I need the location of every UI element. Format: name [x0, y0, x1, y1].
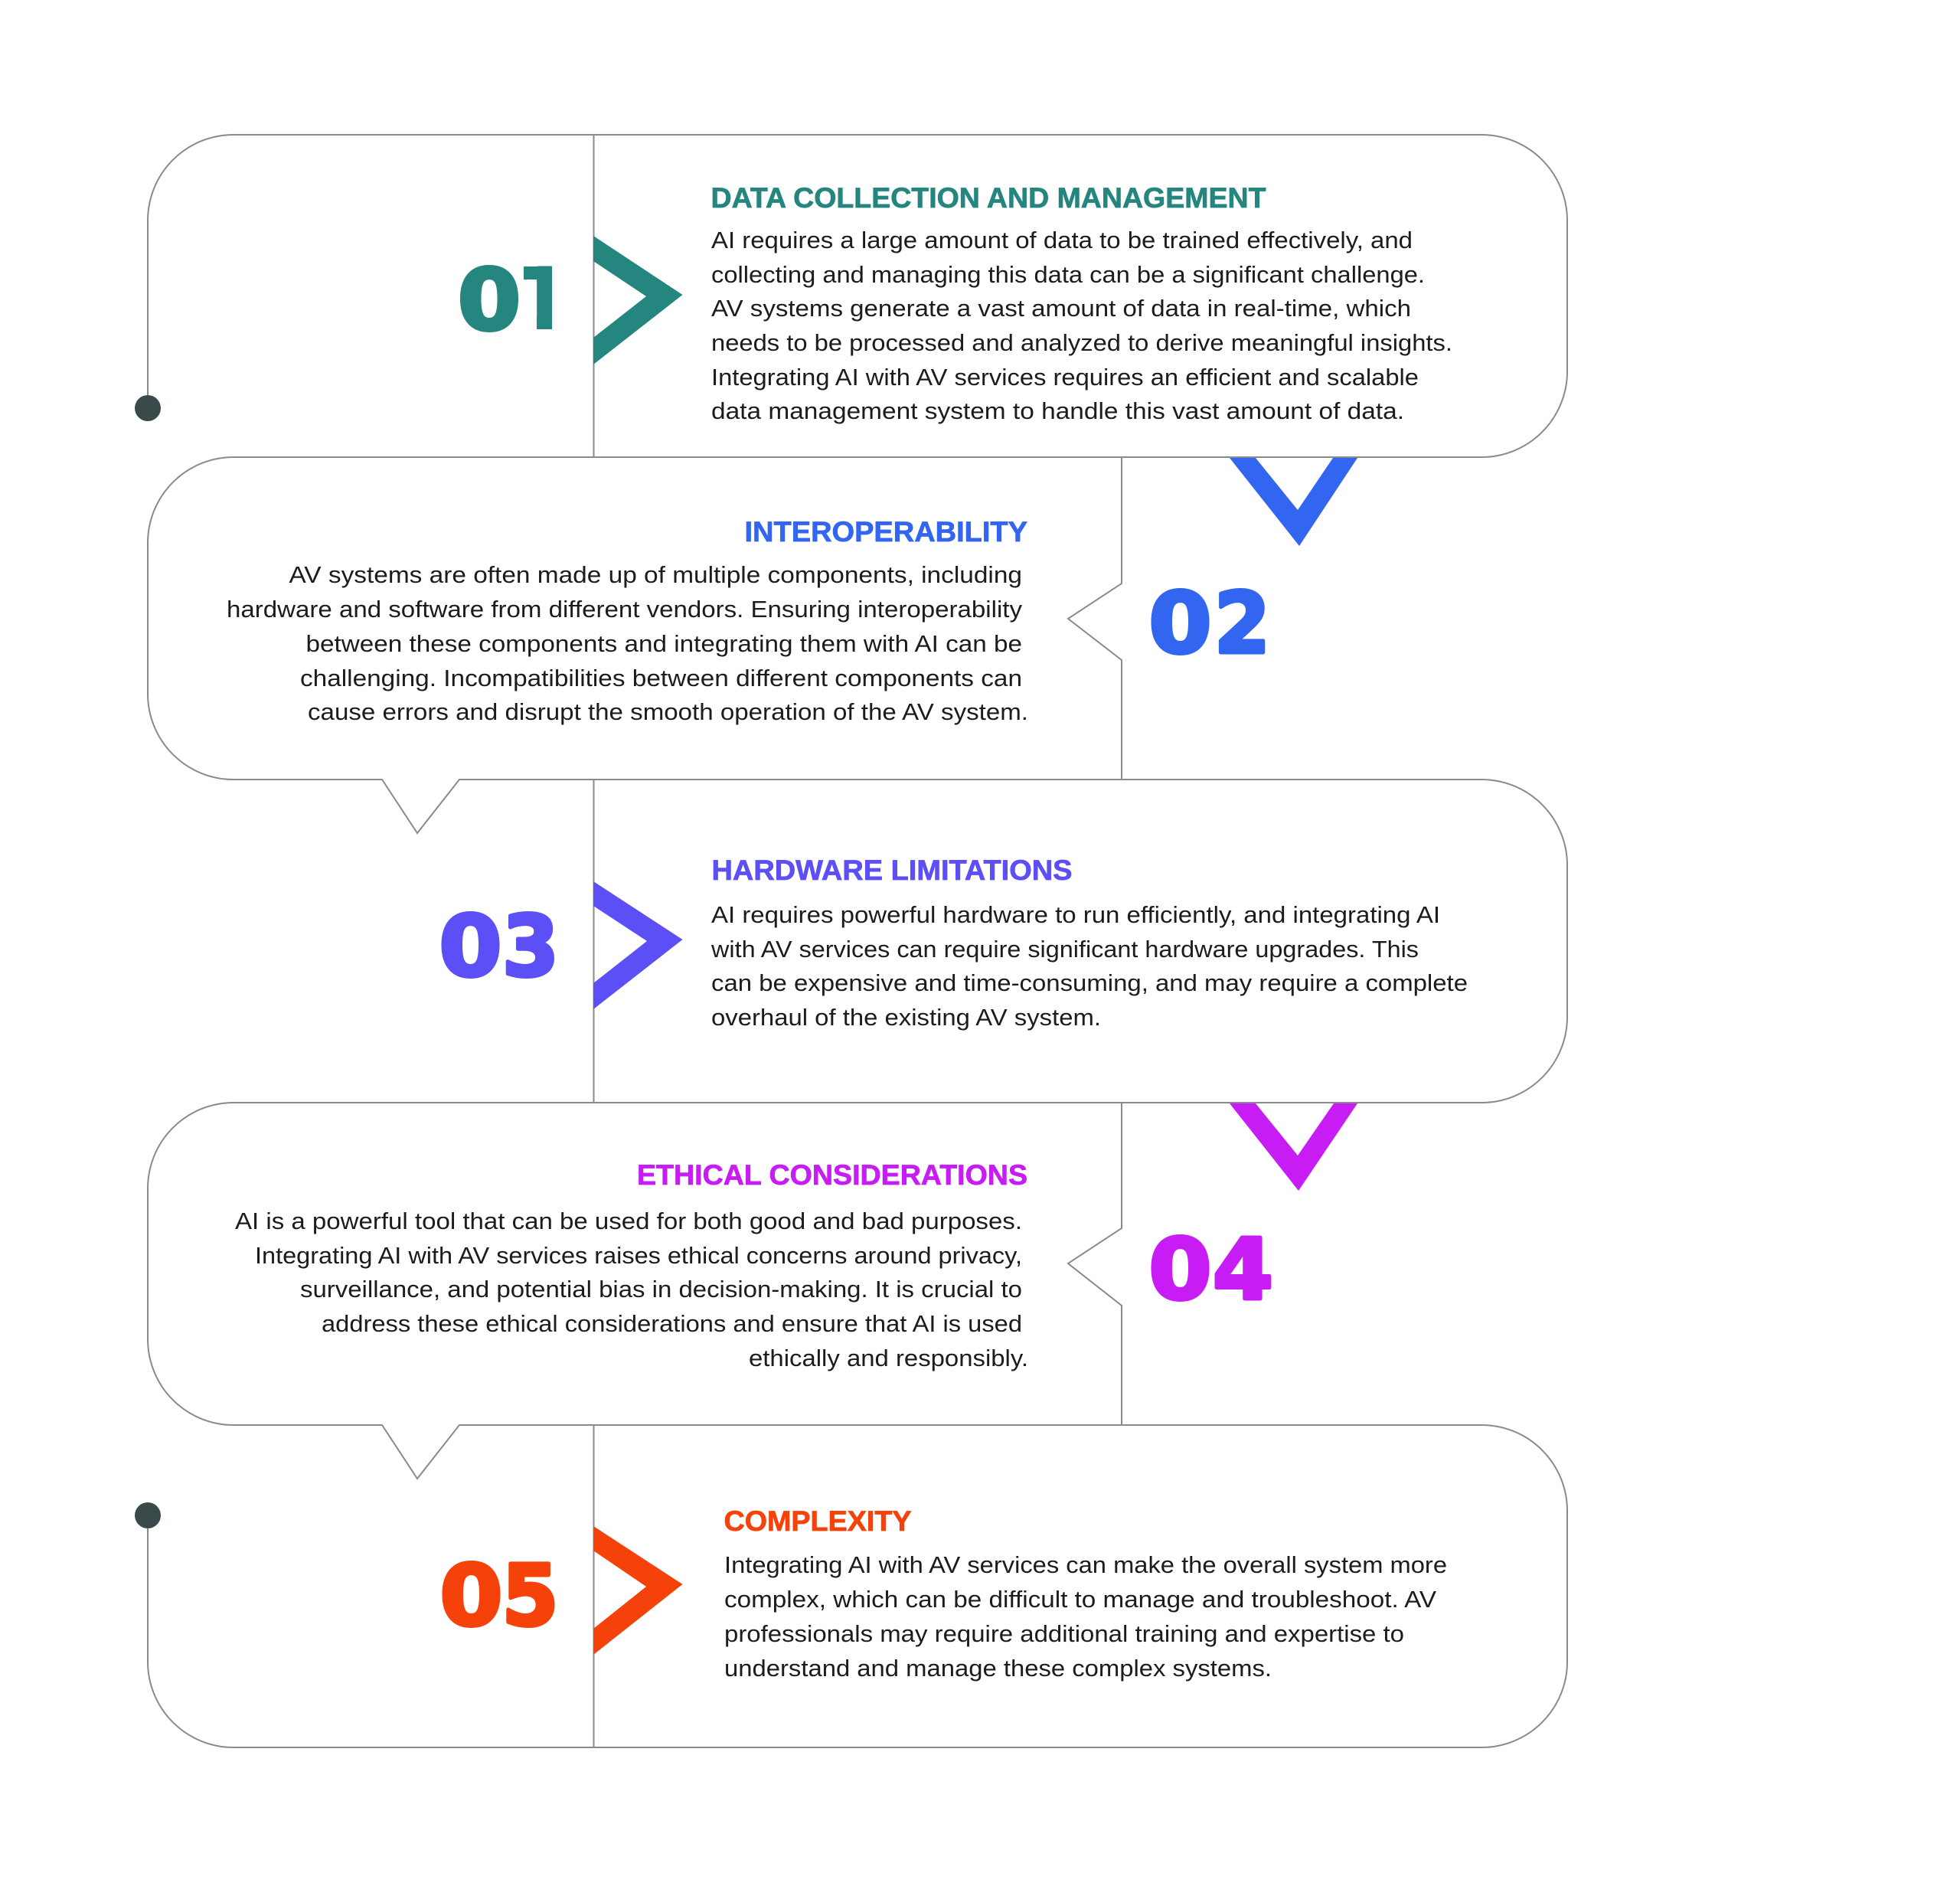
- number 03: 3: [502, 897, 559, 995]
- number 04: 0: [1148, 1221, 1211, 1319]
- body text 02: challenging. Incompatibilities between different components can: [300, 665, 1022, 691]
- number 03: [439, 897, 559, 995]
- body text 04: address these ethical considerations and ensure that AI is used: [322, 1310, 1022, 1337]
- body text 01: needs to be processed and analyzed to derive meaningful insights.: [711, 329, 1452, 356]
- infographic: five connected steps: [135, 134, 1568, 1748]
- heading 01: DATA COLLECTION AND MANAGEMENT: [710, 182, 1266, 214]
- chevron arrow 04: [1230, 1103, 1357, 1191]
- number 04: 4: [1213, 1221, 1273, 1319]
- body text 05: complex, which can be difficult to manage and troubleshoot. AV: [724, 1586, 1436, 1613]
- panel outline 04: [148, 1103, 1122, 1479]
- chevron arrow 01: [593, 236, 683, 364]
- panel outline 01: [148, 135, 1567, 457]
- panel: 05 complexity: [135, 1425, 1567, 1747]
- body text 02: between these components and integrating them with AI can be: [306, 630, 1022, 657]
- end dot: [135, 1502, 161, 1528]
- body text 01: Integrating AI with AV services requires an efficient and scalable: [711, 364, 1419, 391]
- body text 02: cause errors and disrupt the smooth operation of the AV system.: [308, 698, 1028, 725]
- body text 04: ethically and responsibly.: [749, 1345, 1028, 1371]
- chevron arrow 02: [1230, 458, 1357, 546]
- body text 02: hardware and software from different vendors. Ensuring interoperability: [227, 596, 1023, 623]
- body text 05: Integrating AI with AV services can make the overall system more: [724, 1551, 1447, 1578]
- body text 05: understand and manage these complex systems.: [724, 1655, 1272, 1682]
- body text 04: [235, 1208, 1028, 1371]
- number 01: 1: [514, 251, 574, 349]
- heading 02: INTEROPERABILITY: [744, 516, 1027, 547]
- number 01: 0: [458, 251, 521, 349]
- number 02: [1148, 574, 1270, 672]
- number 03: 0: [439, 897, 502, 995]
- body text 03: overhaul of the existing AV system.: [711, 1004, 1101, 1031]
- panel: 01 data collection and management: [135, 135, 1567, 457]
- body text 04: AI is a powerful tool that can be used for both good and bad purposes.: [235, 1208, 1022, 1234]
- body text 03: AI requires powerful hardware to run efficiently, and integrating AI: [711, 901, 1440, 928]
- number 01: [459, 265, 552, 332]
- panel: 02 interoperability: [148, 457, 1357, 833]
- number 02: 0: [1148, 574, 1211, 672]
- number 04: [1148, 1221, 1273, 1319]
- body text 01: collecting and managing this data can be a significant challenge.: [711, 261, 1425, 288]
- chevron arrow 03: [593, 881, 683, 1009]
- heading 03: HARDWARE LIMITATIONS: [712, 855, 1072, 886]
- body text 02: AV systems are often made up of multiple components, including: [289, 561, 1022, 588]
- chevron arrow 05: [593, 1526, 683, 1655]
- number 05: 5: [502, 1547, 559, 1645]
- body text 03: can be expensive and time-consuming, and may require a complete: [711, 969, 1468, 996]
- body text 01: AI requires a large amount of data to be trained effectively, and: [711, 227, 1413, 253]
- panel: 04 ethical considerations: [148, 1103, 1357, 1479]
- body text 05: professionals may require additional training and expertise to: [724, 1620, 1404, 1647]
- body text 04: surveillance, and potential bias in decision-making. It is crucial to: [300, 1276, 1022, 1303]
- number 05: 0: [439, 1547, 502, 1645]
- heading 05: COMPLEXITY: [724, 1505, 912, 1537]
- body text 01: AV systems generate a vast amount of data in real-time, which: [711, 295, 1411, 322]
- body text 03: [710, 901, 1468, 1031]
- body text 05: [724, 1551, 1447, 1682]
- body text 04: Integrating AI with AV services raises ethical concerns around privacy,: [255, 1242, 1022, 1269]
- body text 02: [227, 561, 1028, 725]
- panel outline 03: [594, 780, 1567, 1103]
- panel: 03 hardware limitations: [439, 780, 1567, 1103]
- panel outline 05: [148, 1425, 1567, 1747]
- body text 03: with AV services can require significant hardware upgrades. This: [710, 936, 1419, 963]
- body text 01: [711, 227, 1452, 424]
- start dot: [135, 395, 161, 421]
- heading 04: ETHICAL CONSIDERATIONS: [637, 1159, 1027, 1191]
- body text 01: data management system to handle this vast amount of data.: [711, 397, 1404, 424]
- number 02: 2: [1214, 574, 1270, 672]
- number 05: [439, 1547, 559, 1645]
- panel outline 02: [148, 457, 1122, 833]
